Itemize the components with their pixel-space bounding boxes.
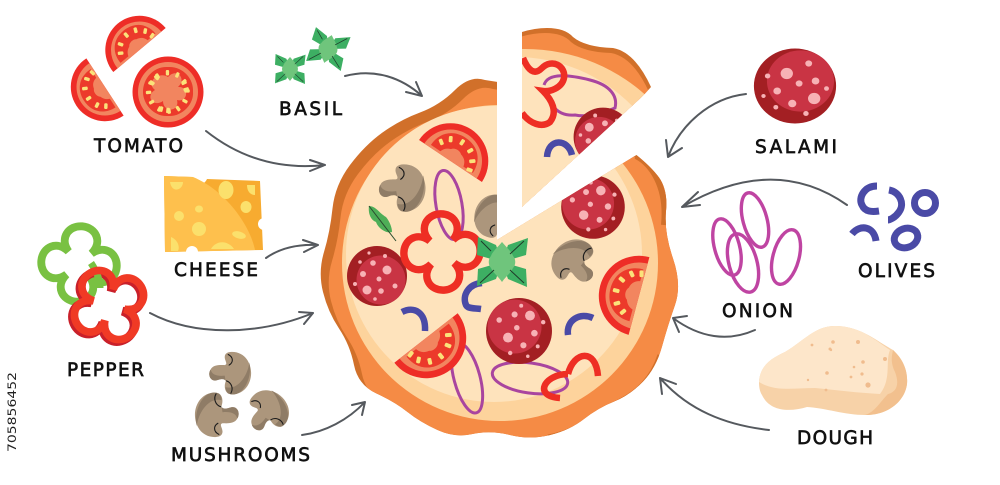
id number: 705856452 [5, 372, 19, 452]
label: basil: BASIL [279, 99, 343, 120]
icon: onion [707, 190, 806, 296]
arrow: tomato [206, 131, 325, 171]
label: olives: OLIVES [858, 261, 935, 282]
pizza: cut slice [522, 28, 651, 207]
label: mushrooms: MUSHROOMS [171, 445, 310, 466]
crust [321, 79, 686, 446]
cheese [342, 105, 658, 421]
icon: olives [852, 186, 936, 251]
basil topping [477, 237, 528, 287]
label: tomato: TOMATO [93, 136, 183, 157]
label: pepper: PEPPER [67, 360, 144, 381]
icon: mushrooms [195, 352, 297, 442]
arrow: basil [345, 73, 422, 96]
pepper ring [402, 212, 482, 292]
leaf [369, 206, 396, 241]
label: onion: ONION [722, 301, 793, 322]
onion rings [430, 168, 570, 416]
arrow: cheese [266, 240, 318, 258]
tomato slices [419, 123, 488, 182]
arrow: dough [660, 378, 769, 430]
pepper arc [544, 356, 598, 398]
label: salami: SALAMI [755, 137, 837, 158]
arrow: olives [682, 180, 847, 207]
arrows [150, 73, 847, 435]
arrow: mushrooms [302, 402, 365, 435]
mushrooms [378, 164, 426, 213]
icon: pepper [38, 223, 160, 358]
arrow: pepper [150, 312, 313, 330]
icon: tomato [58, 2, 204, 134]
arrow: onion [673, 316, 755, 337]
olives [402, 283, 593, 335]
icon: dough [759, 326, 907, 415]
icon: basil [275, 27, 351, 84]
pizza: main [321, 79, 686, 446]
icon: cheese [164, 176, 270, 258]
salami slices [347, 246, 407, 306]
icon: salami [754, 48, 836, 124]
label: dough: DOUGH [797, 428, 873, 449]
label: cheese: CHEESE [174, 260, 258, 281]
arrow: salami [666, 94, 746, 157]
